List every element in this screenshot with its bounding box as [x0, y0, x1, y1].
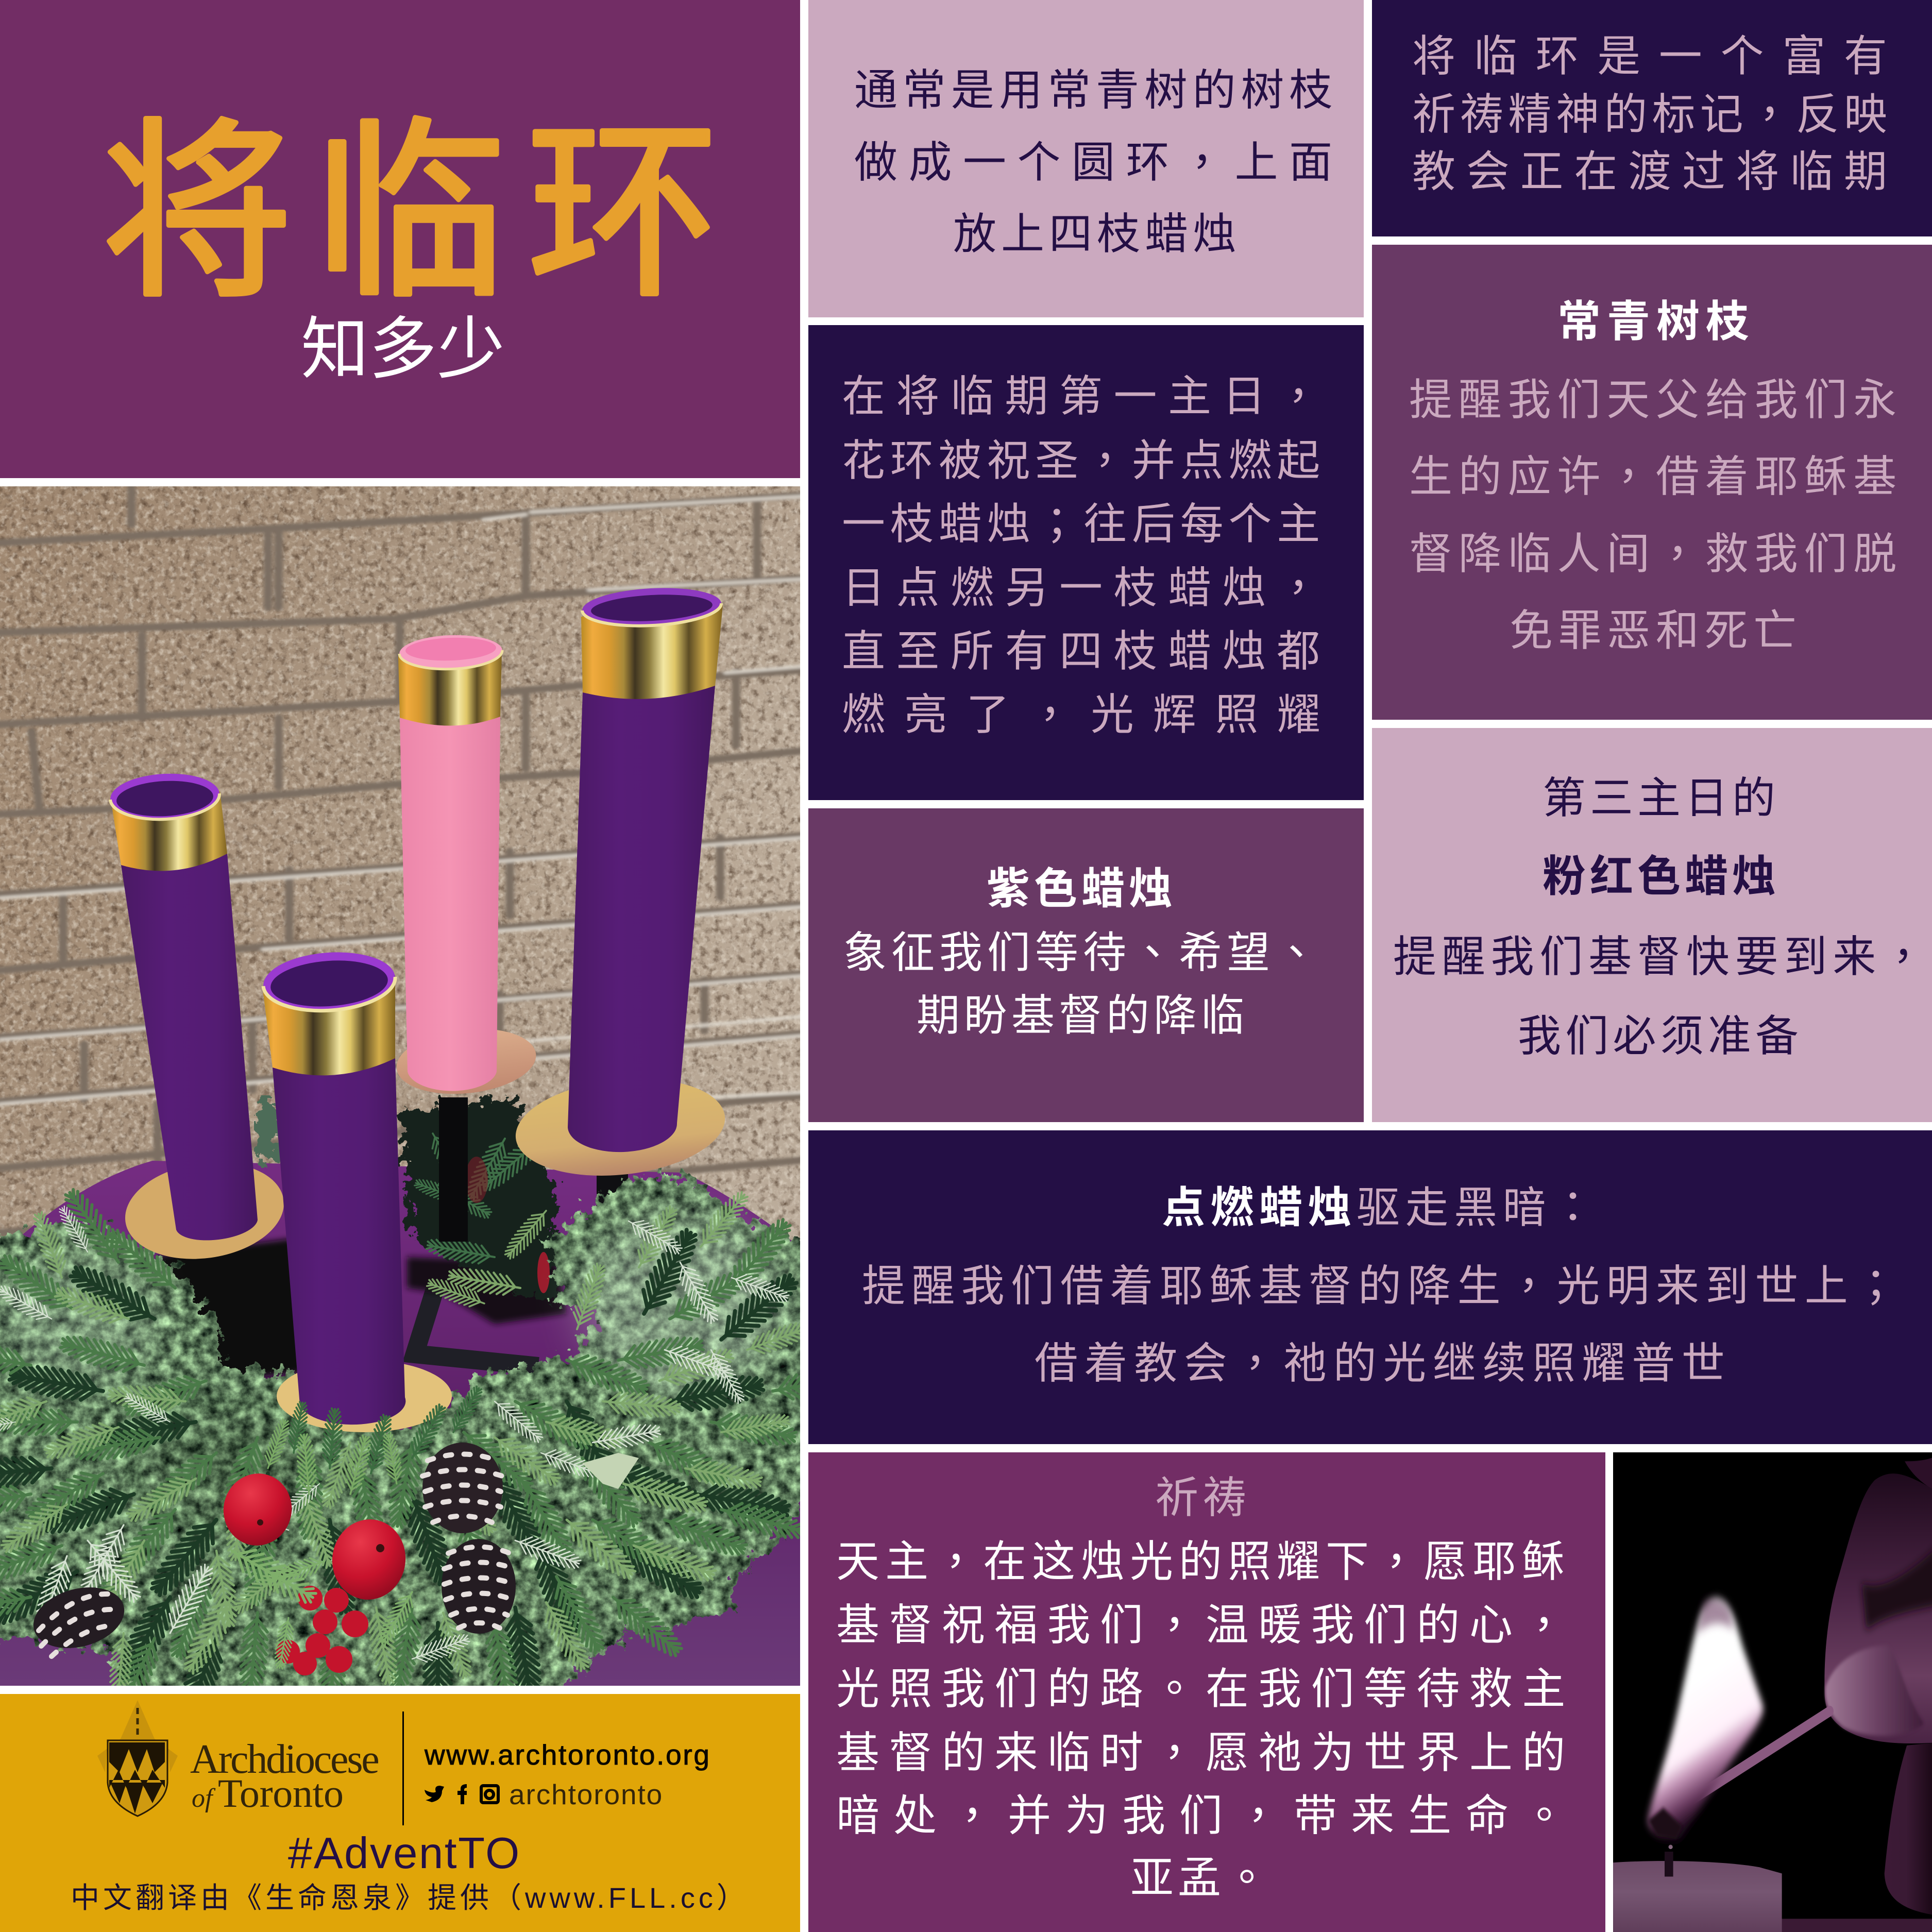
text: Archdiocese of Toronto: Archdiocese	[190, 1737, 378, 1782]
brick wall	[0, 486, 800, 1241]
panel: first Sunday: 一枝蜡烛；往后每个主	[842, 489, 1325, 552]
wreath: evergreen ring	[0, 1177, 859, 1735]
candle wax	[1613, 1861, 1782, 1932]
text: translation credit: 中文翻译由《生命恩泉》提供（www.FLL.cc）	[71, 1882, 749, 1914]
upper finger shadow	[1905, 1455, 1932, 1493]
panel: lighting the candles	[808, 1130, 1932, 1444]
panel: first Sunday: 燃亮了，光辉照耀	[842, 680, 1340, 742]
panel: prayer: 光照我们的路。在我们等待救主	[836, 1654, 1575, 1717]
purple table cloth	[0, 1161, 800, 1686]
panel: first Sunday	[808, 325, 1364, 800]
panel: first Sunday: 日点燃另一枝蜡烛，	[842, 553, 1331, 616]
panel: how the wreath is made: 放上四枝蜡烛	[953, 210, 1241, 258]
dark stand frame and shadows	[158, 1236, 567, 1381]
pale leaf	[582, 1453, 639, 1489]
panel: title	[0, 0, 800, 478]
panel: lighting the candles: 提醒我们借着耶稣基督的降生，光明来到世上；	[862, 1251, 1904, 1314]
panel: pink candle: 粉红色蜡烛	[1543, 852, 1780, 901]
thumb shadow crease	[1862, 1546, 1932, 1630]
panel: sign of prayer: 教会正在渡过将临期	[1412, 147, 1898, 196]
plate: front candle	[277, 1360, 452, 1432]
panel: prayer	[808, 1452, 1605, 1932]
wreath needles: light green layer	[0, 1188, 815, 1702]
panel: footer	[0, 1694, 800, 1932]
panel: sign of prayer: 将临环是一个富有	[1412, 32, 1906, 80]
text: hashtag: #AdventTO	[288, 1829, 521, 1878]
panel: prayer: 暗处，并为我们，带来生命。	[836, 1781, 1580, 1843]
panel: evergreen branches: 常青树枝	[1557, 297, 1755, 346]
panel: prayer: 基督的来临时，愿祂为世界上的	[836, 1718, 1575, 1781]
panel: prayer: 基督祝福我们，温暖我们的心，	[836, 1590, 1575, 1653]
thumb nail	[1825, 1646, 1924, 1736]
panel: pink candle: 提醒我们基督快要到来，	[1393, 922, 1930, 985]
panel: pink candle: 我们必须准备	[1518, 1012, 1803, 1060]
candle: left purple	[109, 771, 258, 1240]
red berries	[276, 1586, 368, 1675]
text: Archdiocese of Toronto: Toronto	[218, 1771, 344, 1816]
heading: 将临环: 将临环	[101, 106, 740, 320]
text: website: www.archtoronto.org	[424, 1739, 711, 1771]
icon: twitter	[425, 1786, 444, 1802]
red apples	[217, 1467, 411, 1604]
panel: evergreen branches	[1372, 245, 1932, 720]
panel: purple candles: 象征我们等待、希望、	[843, 918, 1323, 980]
table surface	[1781, 1919, 1932, 1932]
wreath needles: mid green layer	[0, 1185, 859, 1735]
candle: front purple	[261, 948, 405, 1425]
panel: lighting the candles: 点燃蜡烛驱走黑暗：	[1162, 1173, 1600, 1235]
panel: purple candles	[808, 808, 1364, 1122]
panel: first Sunday: 直至所有四枝蜡烛都	[842, 627, 1331, 675]
pole: pink candle stand	[439, 1097, 468, 1242]
logo: archdiocese crest	[97, 1700, 178, 1816]
plate: pink candle	[393, 1022, 539, 1100]
candle: right purple	[568, 585, 723, 1152]
subtitle: 知多少: 知多少	[301, 311, 505, 387]
panel: prayer: 祈祷	[1155, 1473, 1251, 1522]
panel: first Sunday: 花环被祝圣，并点燃起	[842, 426, 1325, 488]
thumb	[1824, 1473, 1932, 1743]
panel: pink candle	[1372, 728, 1932, 1122]
photo: lighting a candle with a match	[1613, 1452, 1932, 1932]
panel: pink candle: 第三主日的	[1543, 774, 1780, 822]
icon: instagram	[481, 1786, 498, 1803]
panel: lighting the candles: 借着教会，祂的光继续照耀普世	[1035, 1329, 1731, 1391]
back of wreath behind candles	[257, 1097, 557, 1312]
panel: prayer: 天主，在这烛光的照耀下，愿耶稣	[836, 1527, 1570, 1589]
wick	[1665, 1845, 1673, 1876]
panel: purple candles: 紫色蜡烛	[987, 865, 1176, 913]
panel: evergreen branches: 督降临人间，救我们脱	[1409, 519, 1903, 582]
match flame	[1647, 1599, 1764, 1840]
text: social handle: archtoronto	[509, 1778, 663, 1810]
text: Archdiocese of Toronto	[190, 1737, 378, 1816]
photo: Advent wreath with four candles	[0, 486, 800, 1686]
wreath needles: frosted layer	[0, 1204, 791, 1667]
panel: how the wreath is made	[808, 0, 1364, 317]
matchstick	[1689, 1711, 1830, 1802]
plate: right candle	[511, 1069, 730, 1185]
lower finger	[1885, 1742, 1932, 1916]
icon: facebook	[457, 1784, 467, 1804]
candle: pink	[398, 634, 503, 1091]
panel: sign of prayer	[1372, 0, 1932, 236]
panel: evergreen branches: 免罪恶和死亡	[1510, 606, 1802, 655]
panel: evergreen branches: 提醒我们天父给我们永	[1409, 376, 1903, 424]
wreath needles: dark layer	[0, 1226, 802, 1732]
panel: first Sunday: 在将临期第一主日，	[842, 362, 1331, 424]
panel: purple candles: 期盼基督的降临	[917, 991, 1248, 1040]
panel: sign of prayer: 祈祷精神的标记，反映	[1412, 80, 1892, 142]
wreath: front boughs over front candle	[261, 1384, 485, 1496]
green sprigs over apples	[225, 1539, 420, 1670]
pole: right candle stand	[597, 1170, 628, 1324]
text: Archdiocese of Toronto: of	[192, 1784, 216, 1813]
plate: left candle	[119, 1153, 290, 1269]
panel: prayer: 亚孟。	[1130, 1843, 1273, 1906]
panel: evergreen branches: 生的应许，借着耶稣基	[1409, 442, 1903, 504]
pinecones	[27, 1443, 516, 1657]
panel: how the wreath is made: 做成一个圆环，上面	[854, 128, 1344, 190]
panel: how the wreath is made: 通常是用常青树的树枝	[854, 66, 1337, 114]
divider line	[402, 1711, 404, 1825]
